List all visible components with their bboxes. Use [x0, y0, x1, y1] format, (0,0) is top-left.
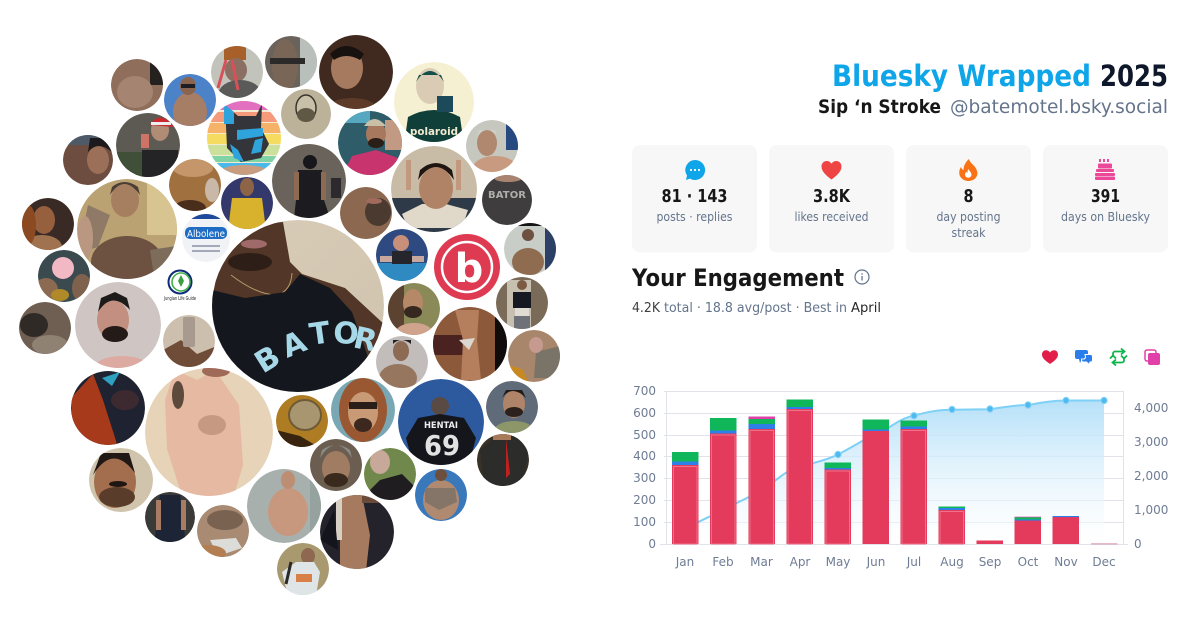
right axis labels	[1134, 401, 1168, 551]
left axis labels: 200	[633, 493, 656, 507]
avatar: sunlit man dark background	[319, 35, 393, 109]
avatar: large cartoon face	[77, 179, 177, 288]
cumulative area	[685, 400, 1104, 544]
avatar: black tee hallway mirror	[496, 277, 548, 330]
bar: Jan	[672, 452, 698, 544]
subtitle: display name and handle	[818, 96, 1168, 118]
avatar: large pale figure	[145, 365, 273, 499]
avatar: mirror selfie white underwear room	[433, 307, 509, 381]
avatar: gray hair mustache	[466, 120, 518, 180]
cumulative line	[685, 400, 1104, 530]
right axis labels: 2,000	[1134, 469, 1168, 483]
avatar cluster	[19, 35, 562, 596]
avatar: dark figure portrait	[265, 36, 317, 88]
right axis labels: 0	[1134, 537, 1142, 551]
avatar: warm skin tone blur	[169, 159, 221, 216]
cumulative markers	[835, 397, 1107, 458]
avatar: big face center white tee	[391, 146, 477, 232]
avatar: hentai 69 jersey on blue: HENTAI	[424, 421, 458, 431]
avatar: mustache man	[89, 448, 153, 512]
chart: monthly engagement	[633, 384, 1168, 569]
bar: May	[824, 462, 851, 544]
right axis labels: 4,000	[1134, 401, 1168, 415]
subtitle: display name and handle: @batemotel.bsky.social	[950, 96, 1168, 118]
avatar: cap and teal shirt selfie	[338, 111, 402, 176]
icon: quote squares	[1145, 350, 1160, 365]
icon: flame	[959, 159, 977, 181]
month labels: Dec	[1092, 555, 1116, 569]
avatar: albolene jar	[182, 214, 230, 262]
right axis labels: 1,000	[1134, 503, 1168, 517]
left axis labels: 300	[633, 471, 656, 485]
avatar: yellow shirt at party	[221, 177, 273, 230]
avatar: hentai 69 jersey on blue: 69	[424, 429, 460, 462]
avatar: gray bator shirt	[482, 174, 532, 225]
icon: info	[855, 270, 869, 284]
avatar: laptop on blue couch	[376, 229, 428, 281]
left axis labels: 700	[633, 384, 656, 398]
avatar: gold carved knob	[276, 395, 328, 448]
month labels: Aug	[940, 555, 964, 569]
icon: reply bubbles	[1075, 350, 1092, 364]
panel: likes received: likes received	[794, 209, 868, 224]
avatar: rainbow pup mask	[207, 101, 281, 175]
month labels: Apr	[790, 555, 810, 569]
left axis labels: 100	[633, 515, 656, 529]
avatar: dark robe mirror	[320, 495, 394, 571]
avatar: hand holding clear cup	[163, 315, 217, 368]
avatar: large bator tank top	[212, 220, 385, 395]
subtitle: display name and handle: Sip ‘n Stroke	[818, 96, 941, 118]
logo: red b badge: b	[455, 246, 483, 292]
grid and axes	[660, 391, 1128, 544]
panel: posts and replies	[632, 145, 757, 252]
avatar: masked figure gym mirror	[272, 144, 346, 218]
engagement summary: April	[851, 300, 881, 316]
month labels: Jan	[675, 555, 694, 569]
avatar: blue and orange dark photo	[71, 371, 145, 448]
avatar: smiling beard green backdrop	[388, 283, 440, 341]
month labels: Sep	[979, 555, 1001, 569]
icon: birthday cake	[1095, 159, 1115, 180]
avatar: beard closeup	[19, 302, 71, 355]
avatar: man leaning arm	[63, 135, 113, 185]
avatar: glasses black tank garden	[364, 448, 416, 500]
avatar: polaroid shirt man	[394, 62, 474, 145]
icon: chat bubble	[685, 160, 705, 180]
panel: day posting streak: day posting	[936, 209, 1000, 224]
avatar: patterned shirt closeup	[508, 330, 562, 385]
avatar: tan portrait top left	[111, 55, 164, 111]
bar: Apr	[786, 400, 813, 544]
bar: Nov	[1052, 516, 1079, 544]
avatar: hooded illustrated man	[331, 378, 395, 442]
right axis labels: 3,000	[1134, 435, 1168, 449]
panel: days on Bluesky	[1043, 145, 1168, 252]
left axis labels: 0	[648, 537, 656, 551]
icon: repost arrows	[1110, 348, 1127, 366]
legend icons	[1042, 348, 1160, 366]
logo: fleur ring with caption: Jungian Life Guide	[163, 296, 196, 302]
panel: days on Bluesky: days on Bluesky	[1061, 209, 1151, 224]
avatar: sunglasses on blue sky	[164, 74, 216, 126]
avatar: white tee mirror selfie	[277, 543, 329, 596]
panel: day posting streak: streak	[952, 225, 986, 240]
avatar: man with patterned hat	[211, 46, 263, 98]
avatar: hentai 69 jersey on blue	[398, 379, 484, 468]
avatar: santa hat selfie	[116, 113, 180, 180]
bar: Sep	[976, 540, 1003, 544]
avatar: cap man pale wall	[504, 223, 557, 276]
avatar: large bator tank top: BATOR	[249, 315, 380, 381]
avatar: sketch of bearded face	[281, 89, 331, 139]
month labels: Nov	[1054, 555, 1078, 569]
logo: red b badge	[434, 234, 500, 300]
bar: Jul	[900, 420, 927, 544]
bar: Aug	[938, 506, 965, 544]
panel: day posting streak	[906, 145, 1031, 252]
avatar: bearded man warm shadow	[22, 198, 74, 250]
logo: fleur ring with caption	[163, 270, 196, 302]
avatar: curly hair green shirt	[486, 381, 538, 433]
engagement summary: 4.2K	[632, 300, 661, 316]
avatar: gray bator shirt: BATOR	[488, 190, 526, 201]
month labels	[675, 555, 1116, 569]
month labels: Oct	[1018, 555, 1039, 569]
avatar: polaroid shirt man: polaroid	[410, 125, 458, 138]
month labels: Jun	[866, 555, 885, 569]
bar: Feb	[710, 418, 736, 544]
avatar: gray shirt on blue sky	[415, 469, 467, 521]
avatar: pink plush in hands	[38, 250, 90, 302]
title: Bluesky Wrapped	[832, 59, 1091, 93]
panel: days on Bluesky: 391	[1091, 186, 1120, 207]
panel: likes received: 3.8K	[813, 186, 851, 207]
month labels: Feb	[712, 555, 734, 569]
panel: likes received	[769, 145, 894, 252]
avatar: cap and hairy chest	[376, 336, 428, 392]
month labels: Jul	[906, 555, 921, 569]
heading: your engagement: Your Engagement	[631, 264, 844, 292]
panel: posts and replies: 81 · 143	[662, 186, 728, 207]
avatar: dark overalls back	[145, 492, 195, 545]
bar: Dec	[1091, 542, 1118, 545]
bar: Jun	[862, 420, 889, 544]
left axis labels	[633, 384, 656, 551]
left axis labels: 600	[633, 406, 656, 420]
month labels: May	[826, 555, 850, 569]
icon: like heart	[1042, 350, 1058, 364]
bar: Oct	[1014, 517, 1041, 544]
avatar: dark jacket red tie	[477, 434, 529, 486]
avatar: bearded closeup skin	[340, 187, 392, 239]
bar: Mar	[748, 416, 775, 544]
title: 2025	[1100, 59, 1168, 93]
left axis labels: 400	[633, 449, 656, 463]
left axis labels: 500	[633, 428, 656, 442]
month labels: Mar	[750, 555, 773, 569]
icon: heart	[822, 161, 842, 180]
panel: day posting streak: 8	[964, 186, 974, 207]
avatar: gray tile room figure	[247, 469, 322, 543]
avatar: bearded man light wall	[75, 282, 161, 368]
avatar: albolene jar: Albolene	[187, 229, 225, 240]
panel: posts and replies: posts · replies	[656, 209, 732, 224]
engagement summary: total · 18.8 avg/post · Best in	[664, 300, 847, 316]
avatar: striped beanie beard	[310, 439, 362, 491]
bars	[672, 400, 1118, 544]
avatar: tan body and white fabric	[197, 505, 249, 557]
